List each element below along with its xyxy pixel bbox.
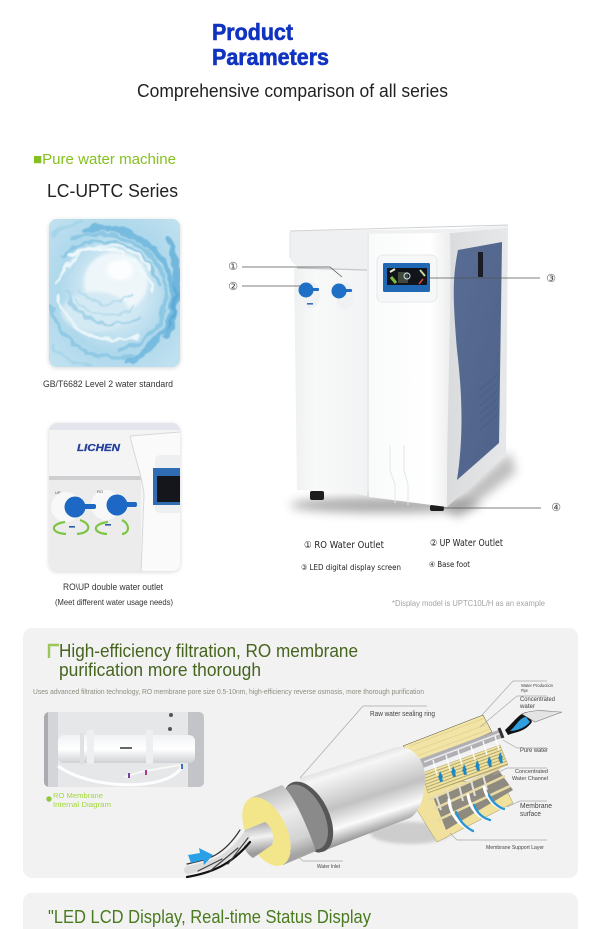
description: Uses advanced filtration technology, RO membrane pore size 0.5-10nm, high-efficiency reverse osmosis, more thorough purification <box>33 687 424 696</box>
photo label: Internal Diagram <box>53 800 111 809</box>
legend: ③ LED digital display screen <box>301 563 401 572</box>
product: water machine <box>290 225 516 518</box>
legend: ④ Base foot <box>429 560 470 569</box>
component labels: Pipe <box>521 688 528 693</box>
photo: RO membrane <box>44 712 204 787</box>
component labels: Membrane <box>520 801 552 810</box>
callout numbers <box>228 260 561 514</box>
component labels: Water Inlet <box>317 864 341 870</box>
heading: High-efficiency filtration, RO membrane <box>59 641 358 661</box>
callout numbers: ② <box>228 280 238 293</box>
component labels: Pure water <box>520 747 549 754</box>
caption: double water outlet: (Meet different water usage needs) <box>55 598 173 607</box>
title: Product <box>212 19 293 45</box>
concentrate outlet <box>505 712 532 735</box>
middle striped sheet <box>422 745 508 793</box>
curved flow arrows <box>449 787 504 831</box>
callout numbers: ④ <box>551 501 561 514</box>
small flow arrows <box>438 752 503 782</box>
feet <box>310 491 444 511</box>
caption: double water outlet <box>55 582 173 607</box>
inner pipe <box>243 822 273 858</box>
component labels: Concentrated <box>515 769 548 775</box>
water inlet hose <box>187 830 250 877</box>
component labels <box>317 683 555 870</box>
caption: water standard: GB/T6682 Level 2 water standard <box>43 379 173 389</box>
legend: ② UP Water Outlet <box>430 538 503 549</box>
panel: LED LCD display <box>23 893 578 929</box>
bottom yellow sheets <box>412 780 513 842</box>
subtitle: Comprehensive comparison of all series <box>137 81 448 101</box>
display <box>377 255 437 302</box>
legend: ① RO Water Outlet <box>304 540 384 551</box>
photo: double water outlet: UP <box>55 490 61 495</box>
heading <box>49 641 358 680</box>
logo: lichen: LICHEN <box>77 442 120 454</box>
large cylinder <box>300 747 425 853</box>
note: *Display model is UPTC10L/H as an example <box>392 599 546 608</box>
component labels: surface <box>520 809 541 818</box>
inlet arrow <box>188 848 213 865</box>
component labels: Membrane Support Layer <box>486 845 544 851</box>
center pipe <box>420 729 504 768</box>
photo: double water outlet <box>49 423 185 572</box>
title: Parameters <box>212 44 329 70</box>
title <box>212 19 329 70</box>
leader lines <box>290 681 547 861</box>
front cylinder <box>250 785 316 865</box>
component labels: Concentrated <box>520 696 555 703</box>
photo: water swirl <box>49 219 180 367</box>
sealing ring <box>272 774 344 860</box>
heading: "LED LCD Display, Real-time Status Display <box>48 907 371 927</box>
component labels: Raw water sealing ring <box>370 709 435 718</box>
callout numbers: ① <box>228 260 238 273</box>
panel: RO membrane filtration <box>23 628 578 878</box>
legend <box>301 538 503 572</box>
callout numbers: ③ <box>546 272 556 285</box>
diagram: RO membrane element <box>187 681 562 877</box>
series heading: LC-UPTC Series <box>47 180 178 201</box>
caption: double water outlet: RO\UP double water outlet <box>63 582 164 592</box>
heading: purification more thorough <box>59 660 261 680</box>
photo: double water outlet: RO <box>97 489 103 494</box>
callout lines <box>242 267 541 508</box>
photo label: RO Membrane <box>53 791 103 800</box>
valves <box>298 282 354 309</box>
section label: pure water machine: ■Pure water machine <box>33 151 176 168</box>
component labels: water <box>519 703 536 710</box>
component labels: Water Channel <box>512 776 548 782</box>
photo label <box>46 791 111 809</box>
component labels: Water Production <box>521 683 554 688</box>
top yellow sheet <box>403 715 492 763</box>
